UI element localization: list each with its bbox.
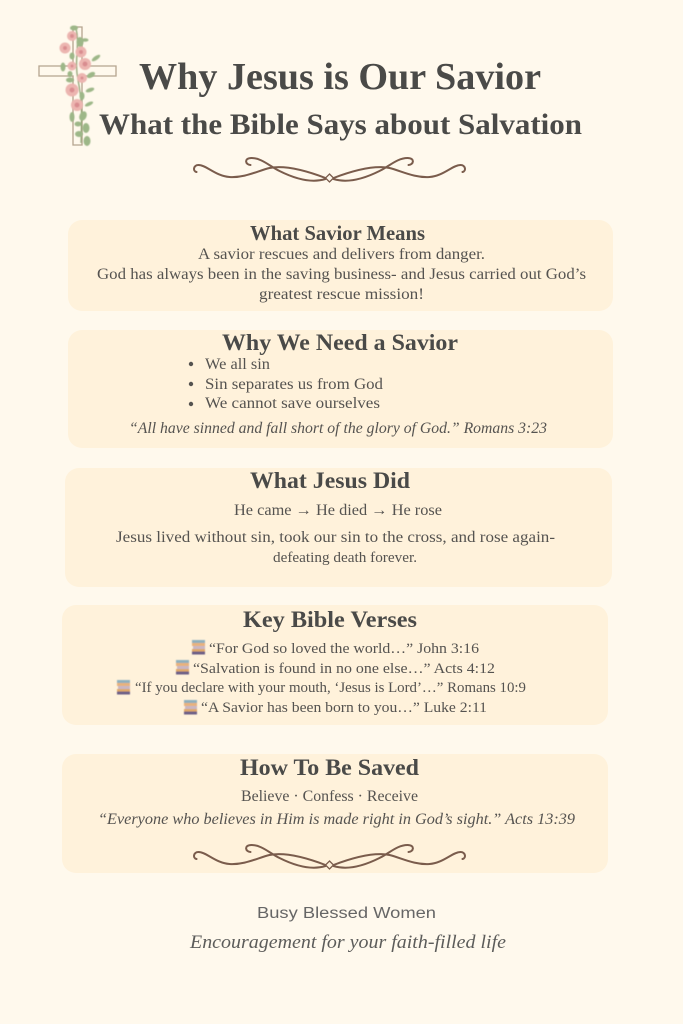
verse: john 3:16: “For God so loved the world…” John 3:16 (209, 641, 480, 657)
ornament: bottom flourish (194, 845, 465, 869)
icon: cross with roses (39, 26, 116, 146)
verse: romans 10:9: “If you declare with your mouth, ‘Jesus is Lord’…” Romans 10:9 (135, 680, 526, 696)
text: definition line 1: A savior rescues and delivers from danger. (198, 246, 485, 263)
text: definition line 2: God has always been in the saving business- and Jesus carried out God’s (97, 266, 586, 283)
ornament: top flourish (194, 158, 465, 182)
icon: books 1 (192, 640, 205, 654)
subtitle: What the Bible Says about Salvation (99, 108, 582, 141)
verse: luke 2:11: “A Savior has been born to you…” Luke 2:11 (201, 700, 487, 716)
panel: why we need a savior (68, 330, 613, 448)
heading: why we need a savior: Why We Need a Savior (222, 330, 458, 355)
text: came, died, rose: He came → He died → He rose (234, 502, 442, 519)
icon: books 2 (176, 660, 189, 674)
quote: acts 13:39: “Everyone who believes in Him is made right in God’s sight.” Acts 13:39 (98, 811, 575, 828)
heading: what savior means: What Savior Means (250, 221, 425, 245)
panel: key bible verses (62, 605, 608, 725)
panel: what jesus did (65, 468, 612, 587)
text: believe, confess, receive: Believe · Confess · Receive (241, 788, 418, 805)
panel: how to be saved (62, 754, 608, 873)
bullet list: We cannot save ourselves (205, 395, 380, 412)
footer: brand name: Busy Blessed Women (257, 905, 436, 922)
quote: romans 3:23: “All have sinned and fall short of the glory of God.” Romans 3:23 (129, 420, 547, 437)
text: description line 2: defeating death forever. (273, 550, 417, 566)
verse: acts 4:12: “Salvation is found in no one else…” Acts 4:12 (193, 661, 495, 677)
text: definition line 3: greatest rescue mission! (259, 286, 424, 303)
icon: books 4 (184, 700, 197, 714)
footer: tagline: Encouragement for your faith-filled life (189, 933, 506, 953)
bullet list (189, 356, 383, 412)
heading: key bible verses: Key Bible Verses (243, 607, 417, 632)
icon: books 3 (117, 680, 130, 694)
bullet list: We all sin (205, 356, 270, 373)
text: description line 1: Jesus lived without sin, took our sin to the cross, and rose again- (116, 529, 555, 546)
panel: what savior means (68, 220, 613, 311)
title: Why Jesus is Our Savior (139, 56, 541, 98)
heading: how to be saved: How To Be Saved (240, 755, 419, 780)
bullet list: Sin separates us from God (205, 376, 383, 393)
heading: what jesus did: What Jesus Did (250, 468, 410, 493)
